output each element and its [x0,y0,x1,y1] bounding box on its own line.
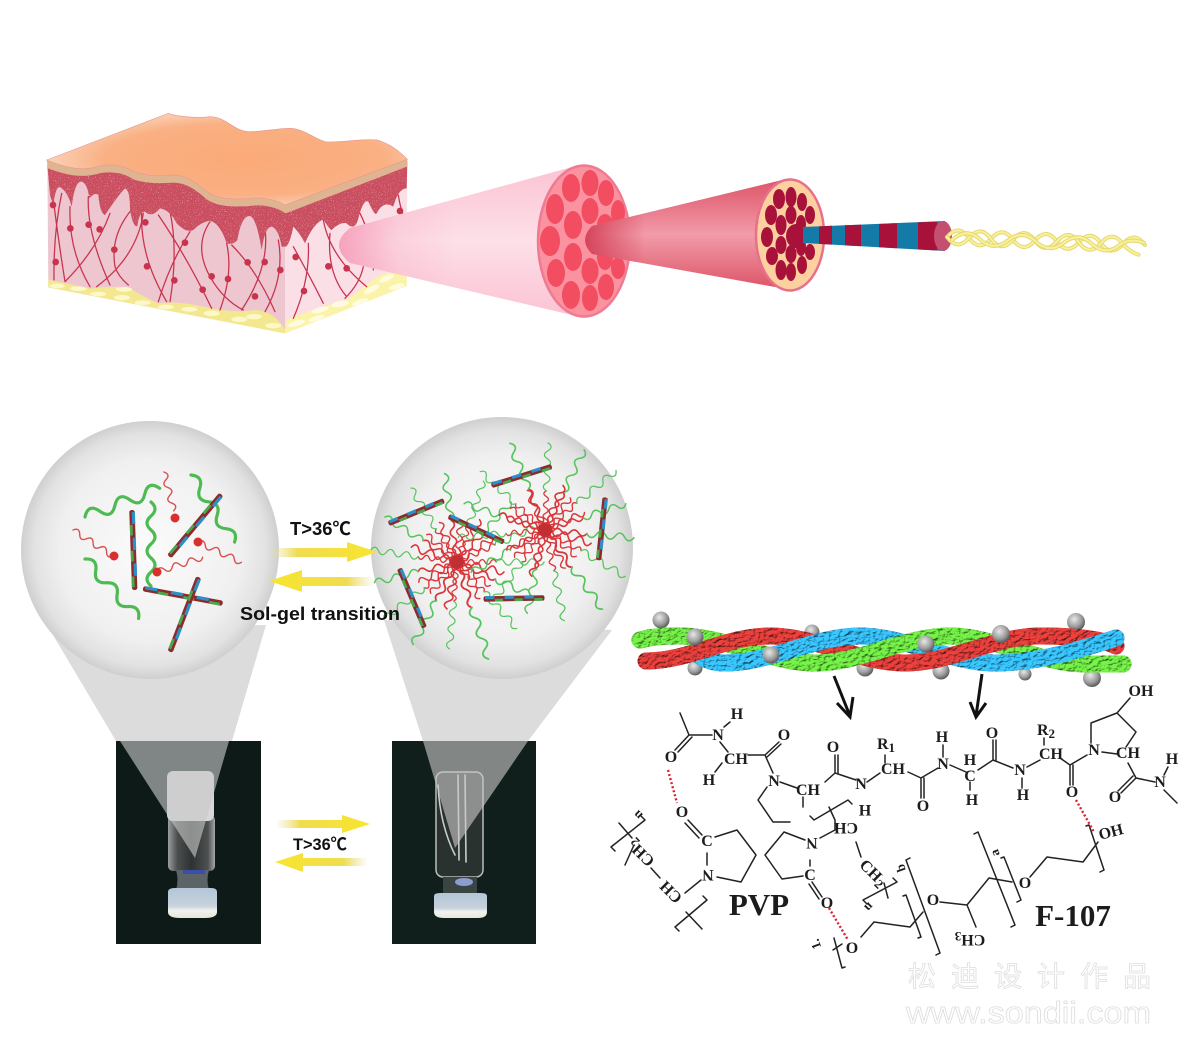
beam overlay on photo [120,741,229,858]
peptide atom labels: H [1017,787,1030,804]
dermis right face [285,159,407,333]
chemical structure: PVP [611,800,897,931]
peptide bonds [675,698,1177,822]
watermark [905,961,1151,1030]
inner glass reflections [438,775,466,862]
fibril origin [786,224,806,248]
peptide atom labels: N [768,773,780,790]
blue fibril body [803,221,945,251]
F-107 atom labels: 3 [954,929,961,944]
F-107 atom labels: O [927,892,939,909]
chemical structure: F-107 [807,821,1126,968]
PVP atom labels: CH [856,857,885,886]
micelle star 1 [370,473,544,660]
fibre cone [585,180,824,290]
cross-section with fibres [538,166,630,316]
F-107 atom labels: CH [961,931,985,948]
watermark: url: www.sondii.com [905,995,1151,1030]
F-107 atom labels: O [846,940,858,957]
triple helix collagen [640,612,1123,687]
arrow: down to peptide right [970,674,986,717]
projection beam from right sphere [384,620,612,741]
peptide atom labels: N [855,776,867,793]
vial glass [168,815,215,871]
arrow: photo gel to sol [275,853,367,872]
peptide atom labels: 2 [1049,726,1055,741]
peptide atom labels: O [1109,789,1121,806]
PVP atom labels [625,801,889,916]
PVP atom labels: CH [629,840,658,869]
F-107 bonds [833,825,1104,968]
peptide atom labels: N [1088,742,1100,759]
peptide atom labels: H [731,706,744,723]
PVP atom labels: n [629,807,646,823]
collagen rods [390,466,606,627]
epidermis layer [47,162,407,250]
cone body [585,180,786,289]
PVP atom labels: 2 [871,876,887,892]
PVP atom labels: 2 [627,834,643,850]
micelle star 2 [458,442,634,621]
F-107 atom labels: 1. [807,937,824,951]
twisted strands [640,636,1123,664]
peptide atom labels: R [877,736,889,753]
peptide atom labels: OH [1129,683,1154,700]
peptide atom labels: H [964,752,977,769]
F-107 atom labels: b [892,862,909,874]
peptide atom labels: H [1166,751,1179,768]
cone body [339,167,572,315]
fat layer left [48,279,285,333]
right photo: sol vial [392,741,536,944]
red polymer chains with heads [71,471,243,576]
F-107 name: F-107 [1035,898,1111,933]
cone tip shade [585,180,786,289]
vial neck [176,870,209,890]
chemical structure: collagen peptide [665,683,1179,822]
peptide atom labels: O [827,739,839,756]
collagen rods [131,495,221,650]
beam overlay on photo [423,741,528,848]
peptide atom labels: R [1037,722,1049,739]
blue stopper [183,870,205,874]
peptide atom labels: N [1014,762,1026,779]
sphere [371,417,633,679]
peptide atom labels: O [778,727,790,744]
dark photo background [392,741,536,944]
F-107 atom labels: a [986,847,1003,859]
left sphere: sol state [21,421,279,679]
label: temperature lower: T>36℃ [293,835,347,854]
rear nanoparticles [652,612,1101,687]
PVP atom labels: H [858,801,871,818]
blue droplet [455,878,473,886]
F-107 atom labels [807,821,1126,957]
right sphere: gel state [370,417,634,679]
PVP atom labels: N [806,834,818,851]
opaque gel plug [167,771,214,821]
vial cap [168,888,217,918]
PVP atom labels: O [821,895,833,912]
PVP bonds [611,816,756,931]
PVP name: PVP [729,887,789,922]
F-107 atom labels: OH [1097,821,1126,844]
skin block illustration [47,113,407,333]
watermark: studio name: 松迪设计作品 [908,961,1151,992]
peptide atom labels: H [966,792,979,809]
peptide atom labels: O [986,725,998,742]
vial glass [436,772,483,877]
peptide atom labels: C [964,768,976,785]
dark photo background [116,741,261,944]
PVP atom labels: C [701,833,713,850]
PVP atom labels: O [676,804,688,821]
fibril with striped bands [786,221,952,251]
PVP atom labels: CH [833,819,858,836]
peptide atom labels: CH [1116,745,1141,762]
blood vessels [50,193,403,318]
arrow: sol to gel (upper) [271,542,377,562]
arrow: down to peptide left [834,676,853,717]
arrow: photo sol to gel [277,815,370,833]
left photo: gel vial [116,741,261,944]
PVP atom labels: n [861,899,877,916]
hydrogen bond dotted lines [668,770,1094,940]
sphere [21,421,279,679]
vial cap [434,893,487,918]
fat layer right [285,270,407,333]
fibril end cap [934,221,952,251]
PVP atom labels: CH [656,877,686,906]
cone tip shade [339,167,572,315]
peptide atom labels: N [712,727,724,744]
label: temperature upper: T>36℃ [290,519,351,539]
projection beam from left sphere [50,625,266,741]
cross-section with fibrils [756,180,824,290]
green polymer chains [81,472,239,622]
vial neck [443,877,477,893]
peptide atom labels: CH [796,782,821,799]
peptide atom labels: CH [881,761,906,778]
red bands [819,222,937,250]
twisted yellow triple helix [947,230,1145,255]
peptide atom labels: H [936,729,949,746]
peptide atom labels: CH [1039,746,1064,763]
peptide atom labels: H [703,772,716,789]
tan stratum band [47,159,407,213]
peptide atom labels: O [917,798,929,815]
peptide atom labels: N [937,756,949,773]
label: sol-gel transition: Sol-gel transition [240,604,400,624]
front nanoparticles [686,625,1010,664]
peptide atom labels: N [1154,774,1166,791]
peptide atom labels [665,683,1179,815]
peptide atom labels: O [665,749,677,766]
muscle bundle cone [339,166,630,316]
peptide atom labels: O [1066,784,1078,801]
arrow: gel to sol (upper) [269,570,373,592]
F-107 atom labels: O [1019,875,1031,892]
skin surface [47,113,407,205]
PVP atom labels: N [702,866,714,883]
peptide atom labels: CH [724,751,749,768]
PVP atom labels: C [804,867,816,884]
dermis left face [47,160,285,333]
peptide atom labels: 1 [889,740,895,755]
